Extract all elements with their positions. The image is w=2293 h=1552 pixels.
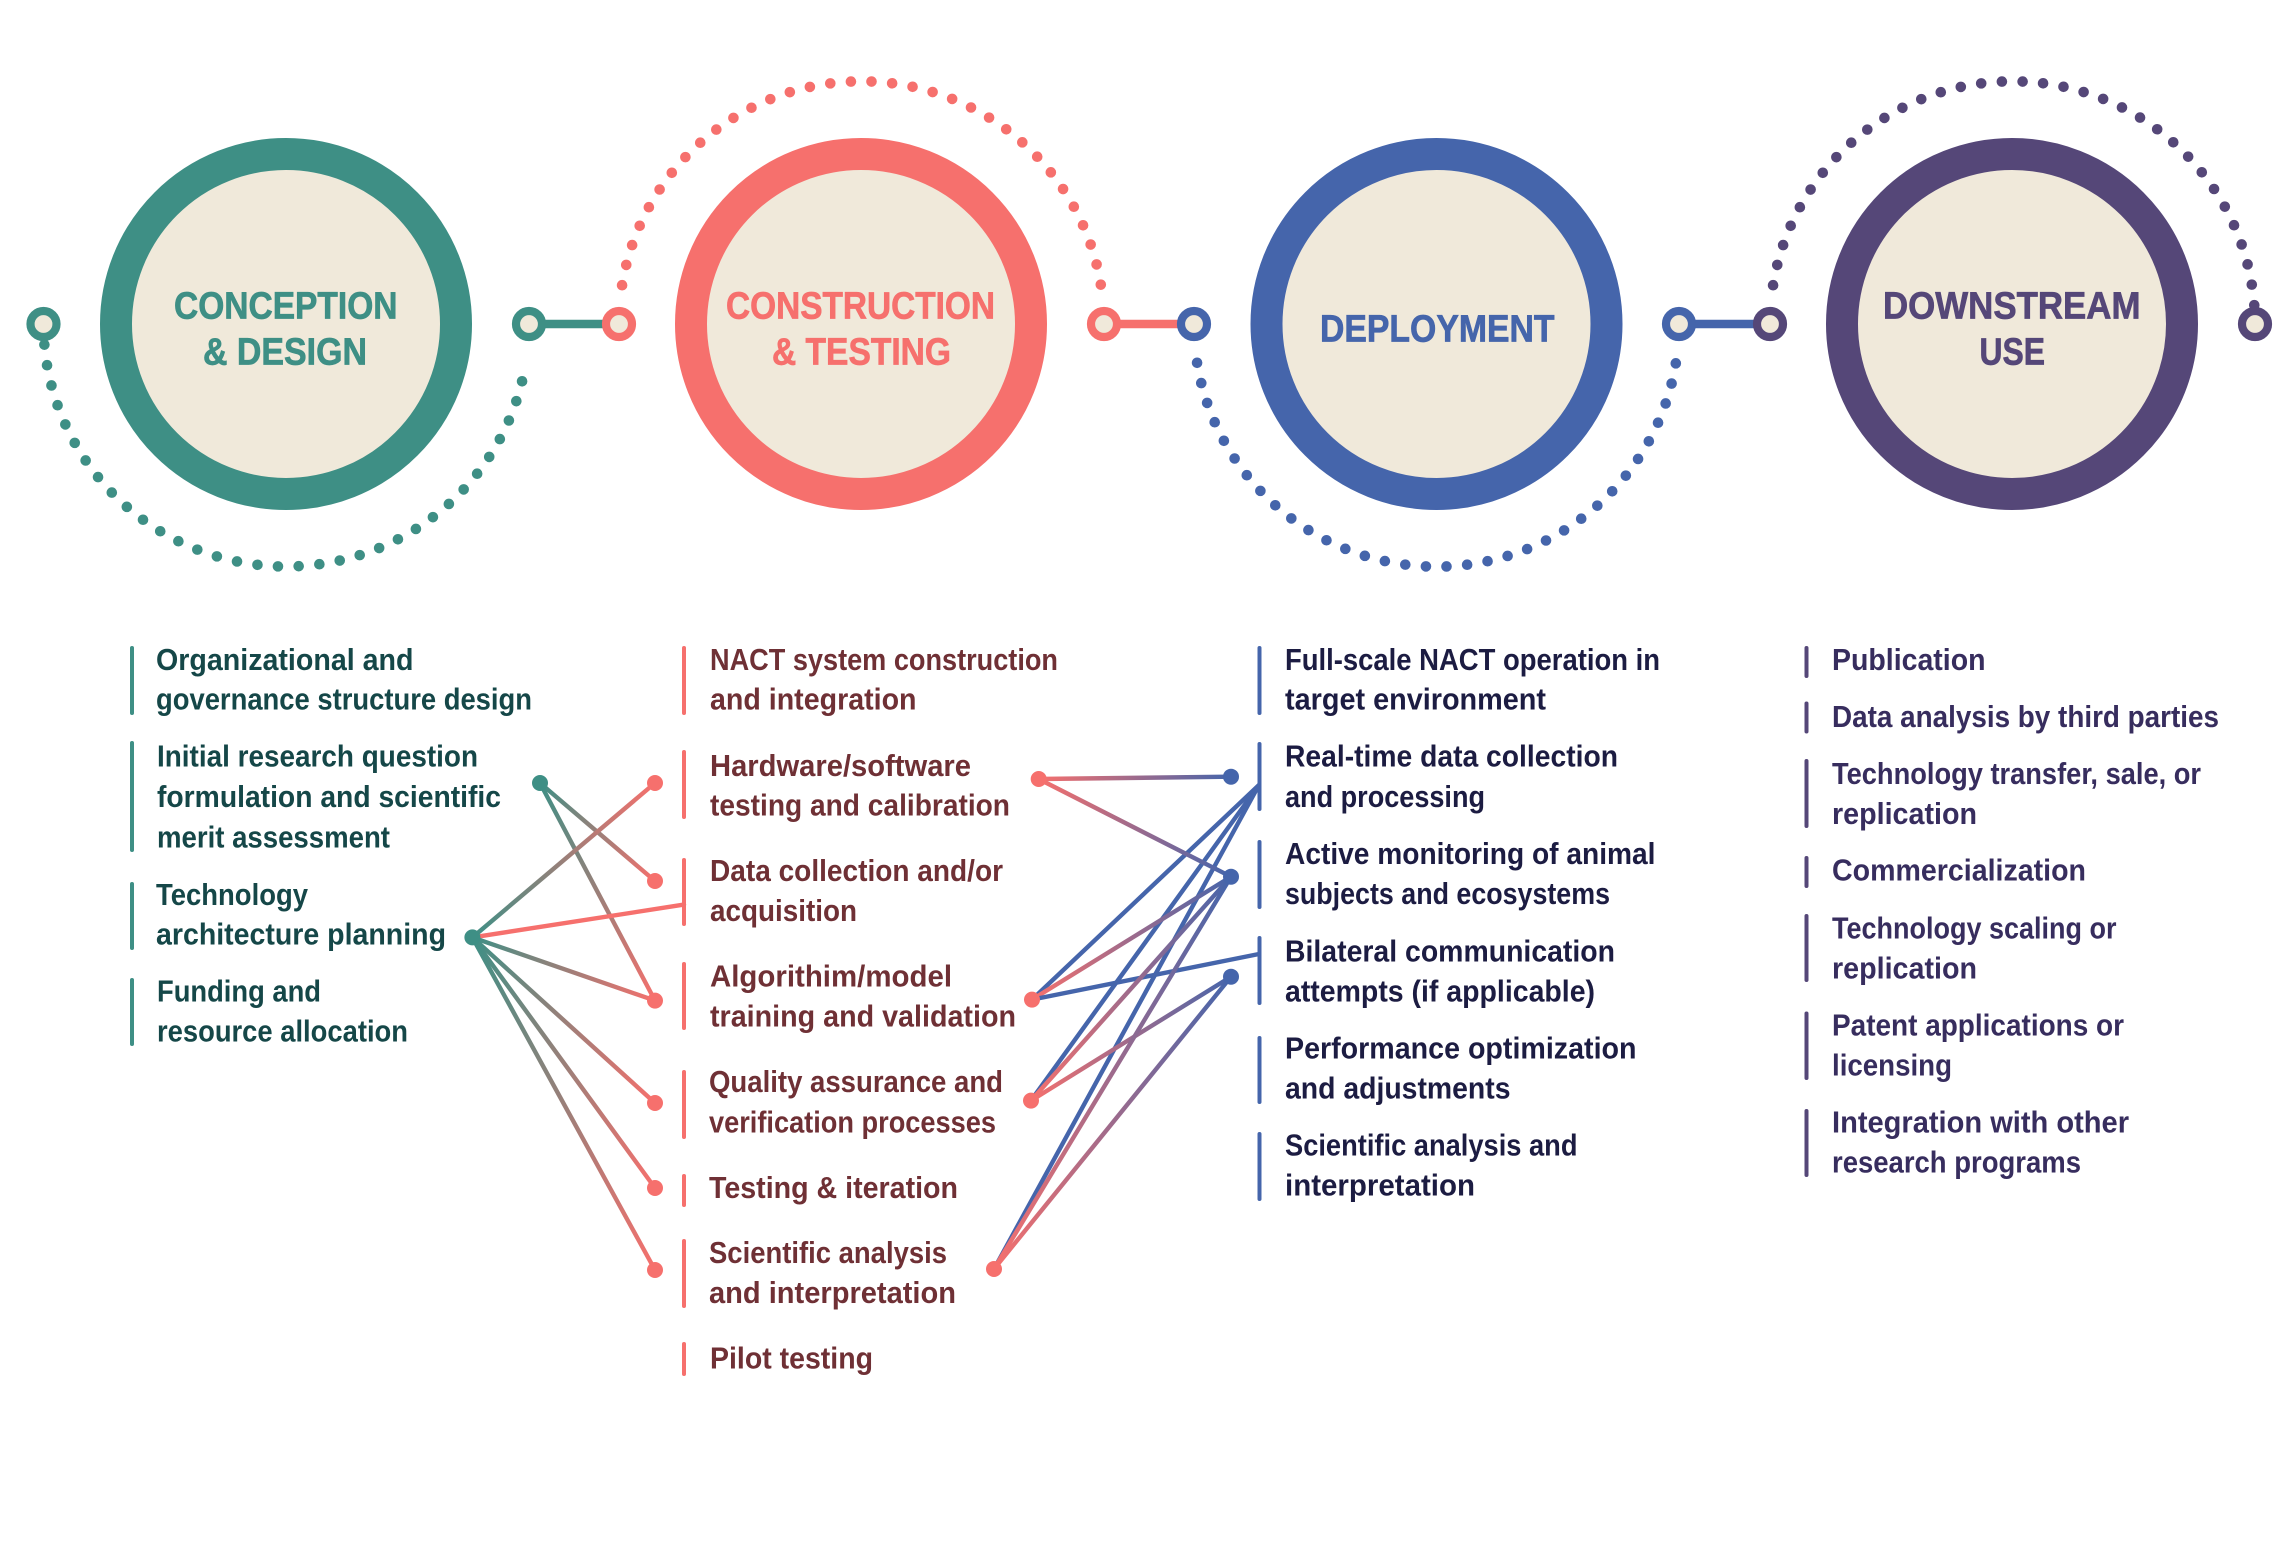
- list: downstream use: [1806, 642, 2219, 1180]
- item: data collection: [684, 853, 1003, 928]
- item: data collection: acquisition: [710, 893, 857, 928]
- item: full-scale operation: target environment: [1285, 682, 1546, 717]
- heading: downstream use: DOWNSTREAM: [1883, 286, 2140, 328]
- item: scientific analysis: Scientific analysis: [709, 1235, 947, 1270]
- item: research question: merit assessment: [157, 820, 390, 855]
- ring node: deployment start: [1181, 311, 1207, 337]
- heading: downstream use: USE: [1980, 332, 2045, 374]
- ring node: deployment end: [1666, 311, 1692, 337]
- item: patents: licensing: [1832, 1048, 1952, 1083]
- item: research integration: research programs: [1832, 1145, 2081, 1180]
- ring node: conception end: [516, 311, 542, 337]
- item: organizational design: governance structure design: [156, 682, 532, 717]
- heading: conception and design: & DESIGN: [203, 332, 367, 374]
- item: third-party analysis: Data analysis by third parties: [1832, 699, 2219, 734]
- item: algorithm training: training and validation: [710, 999, 1016, 1034]
- item: algorithm training: Algorithim/model: [710, 959, 952, 994]
- item: technology scaling: replication: [1832, 951, 1977, 986]
- circle: downstream use: [1842, 154, 2182, 494]
- item: research question: Initial research question: [157, 739, 478, 774]
- item: performance optimization: [1260, 1031, 1636, 1106]
- item: bilateral communication: [1260, 934, 1615, 1009]
- item: hardware testing: [684, 748, 1010, 823]
- connector: construction to deployment: [1104, 320, 1194, 328]
- dotted arc: construction: [622, 81, 1101, 285]
- heading: downstream use: [1883, 286, 2140, 374]
- item: technology architecture: [132, 877, 446, 952]
- item: hardware testing: Hardware/software: [710, 748, 971, 783]
- item: active monitoring: [1260, 836, 1656, 911]
- dotted arc: deployment: [1197, 363, 1676, 567]
- item: research integration: [1806, 1105, 2129, 1180]
- item: bilateral communication: Bilateral communication: [1285, 934, 1615, 969]
- item: research integration: Integration with other: [1832, 1105, 2129, 1140]
- item: performance optimization: and adjustments: [1285, 1071, 1510, 1106]
- item: scientific analysis: interpretation: [1285, 1168, 1475, 1203]
- item: full-scale operation: Full-scale NACT operation in: [1285, 642, 1660, 677]
- item: research question: [132, 739, 501, 855]
- item: technology transfer: [1806, 756, 2201, 831]
- item: scientific analysis: and interpretation: [709, 1275, 956, 1310]
- item: scientific analysis: Scientific analysis and: [1285, 1128, 1578, 1163]
- heading: conception and design: [174, 286, 398, 374]
- item: funding: Funding and: [157, 974, 321, 1009]
- connector: deployment to downstream use: [1679, 320, 1770, 328]
- item: quality assurance: verification processes: [709, 1105, 996, 1140]
- ring node: downstream start: [1757, 311, 1783, 337]
- item: funding: [132, 974, 408, 1049]
- item: active monitoring: Active monitoring of animal: [1285, 836, 1656, 871]
- item: publication: Publication: [1832, 642, 1986, 677]
- dotted arc: downstream use: [1773, 81, 2255, 324]
- item: system construction: [684, 642, 1058, 717]
- stage: downstream use: [1757, 81, 2268, 494]
- item: funding: resource allocation: [157, 1014, 408, 1049]
- item: technology transfer: replication: [1832, 796, 1977, 831]
- stage: conception and design: [30, 154, 619, 567]
- list: construction and testing: [684, 642, 1058, 1376]
- ring node: construction end: [1091, 311, 1117, 337]
- item: system construction: NACT system construction: [710, 642, 1058, 677]
- item: real-time data: Real-time data collection: [1285, 739, 1618, 774]
- item: algorithm training: [684, 959, 1016, 1034]
- item: patents: [1806, 1008, 2124, 1083]
- list: conception and design: [132, 642, 532, 1049]
- circle: conception: [116, 154, 456, 494]
- item: system construction: and integration: [710, 682, 916, 717]
- heading: deployment: DEPLOYMENT: [1320, 309, 1554, 351]
- item: active monitoring: subjects and ecosystems: [1285, 876, 1610, 911]
- item: performance optimization: Performance optimization: [1285, 1031, 1636, 1066]
- item: scientific analysis: [684, 1235, 956, 1310]
- item: technology architecture: Technology: [156, 877, 309, 912]
- item: organizational design: [132, 642, 532, 717]
- connections: construction to deployment: [986, 769, 1259, 1277]
- item: patents: Patent applications or: [1832, 1008, 2124, 1043]
- dotted arc: conception: [44, 324, 526, 567]
- item: commercialization: Commercialization: [1832, 853, 2086, 888]
- heading: conception and design: CONCEPTION: [174, 286, 398, 328]
- item: real-time data: [1260, 739, 1618, 814]
- item: quality assurance: Quality assurance and: [709, 1064, 1003, 1099]
- item: organizational design: Organizational and: [156, 642, 414, 677]
- item: technology transfer: Technology transfer, sale, or: [1832, 756, 2201, 791]
- connector: conception to construction: [529, 320, 619, 328]
- stage: deployment: [1181, 154, 1770, 567]
- item: technology architecture: architecture planning: [156, 917, 446, 952]
- item: data collection: Data collection and/or: [710, 853, 1003, 888]
- heading: construction and testing: CONSTRUCTION: [726, 286, 995, 328]
- heading: construction and testing: & TESTING: [772, 332, 951, 374]
- stage: construction and testing: [606, 81, 1194, 494]
- connections: conception to construction: [464, 775, 684, 1278]
- circle: deployment: [1266, 154, 1606, 494]
- item: bilateral communication: attempts (if applicable): [1285, 974, 1595, 1009]
- circle: construction: [691, 154, 1031, 494]
- item: technology scaling: Technology scaling or: [1832, 911, 2116, 946]
- ring node: downstream end: [2242, 311, 2268, 337]
- item: testing and iteration: Testing & iteration: [709, 1170, 958, 1205]
- ring node: conception start: [30, 311, 56, 337]
- ring node: construction start: [606, 311, 632, 337]
- item: research question: formulation and scientific: [157, 779, 501, 814]
- item: hardware testing: testing and calibration: [710, 788, 1010, 823]
- item: scientific analysis: [1260, 1128, 1578, 1203]
- heading: construction and testing: [726, 286, 995, 374]
- item: real-time data: and processing: [1285, 779, 1485, 814]
- item: full-scale operation: [1260, 642, 1660, 717]
- item: technology scaling: [1806, 911, 2116, 986]
- list: deployment: [1260, 642, 1660, 1203]
- item: quality assurance: [684, 1064, 1003, 1140]
- item: pilot testing: Pilot testing: [710, 1341, 873, 1376]
